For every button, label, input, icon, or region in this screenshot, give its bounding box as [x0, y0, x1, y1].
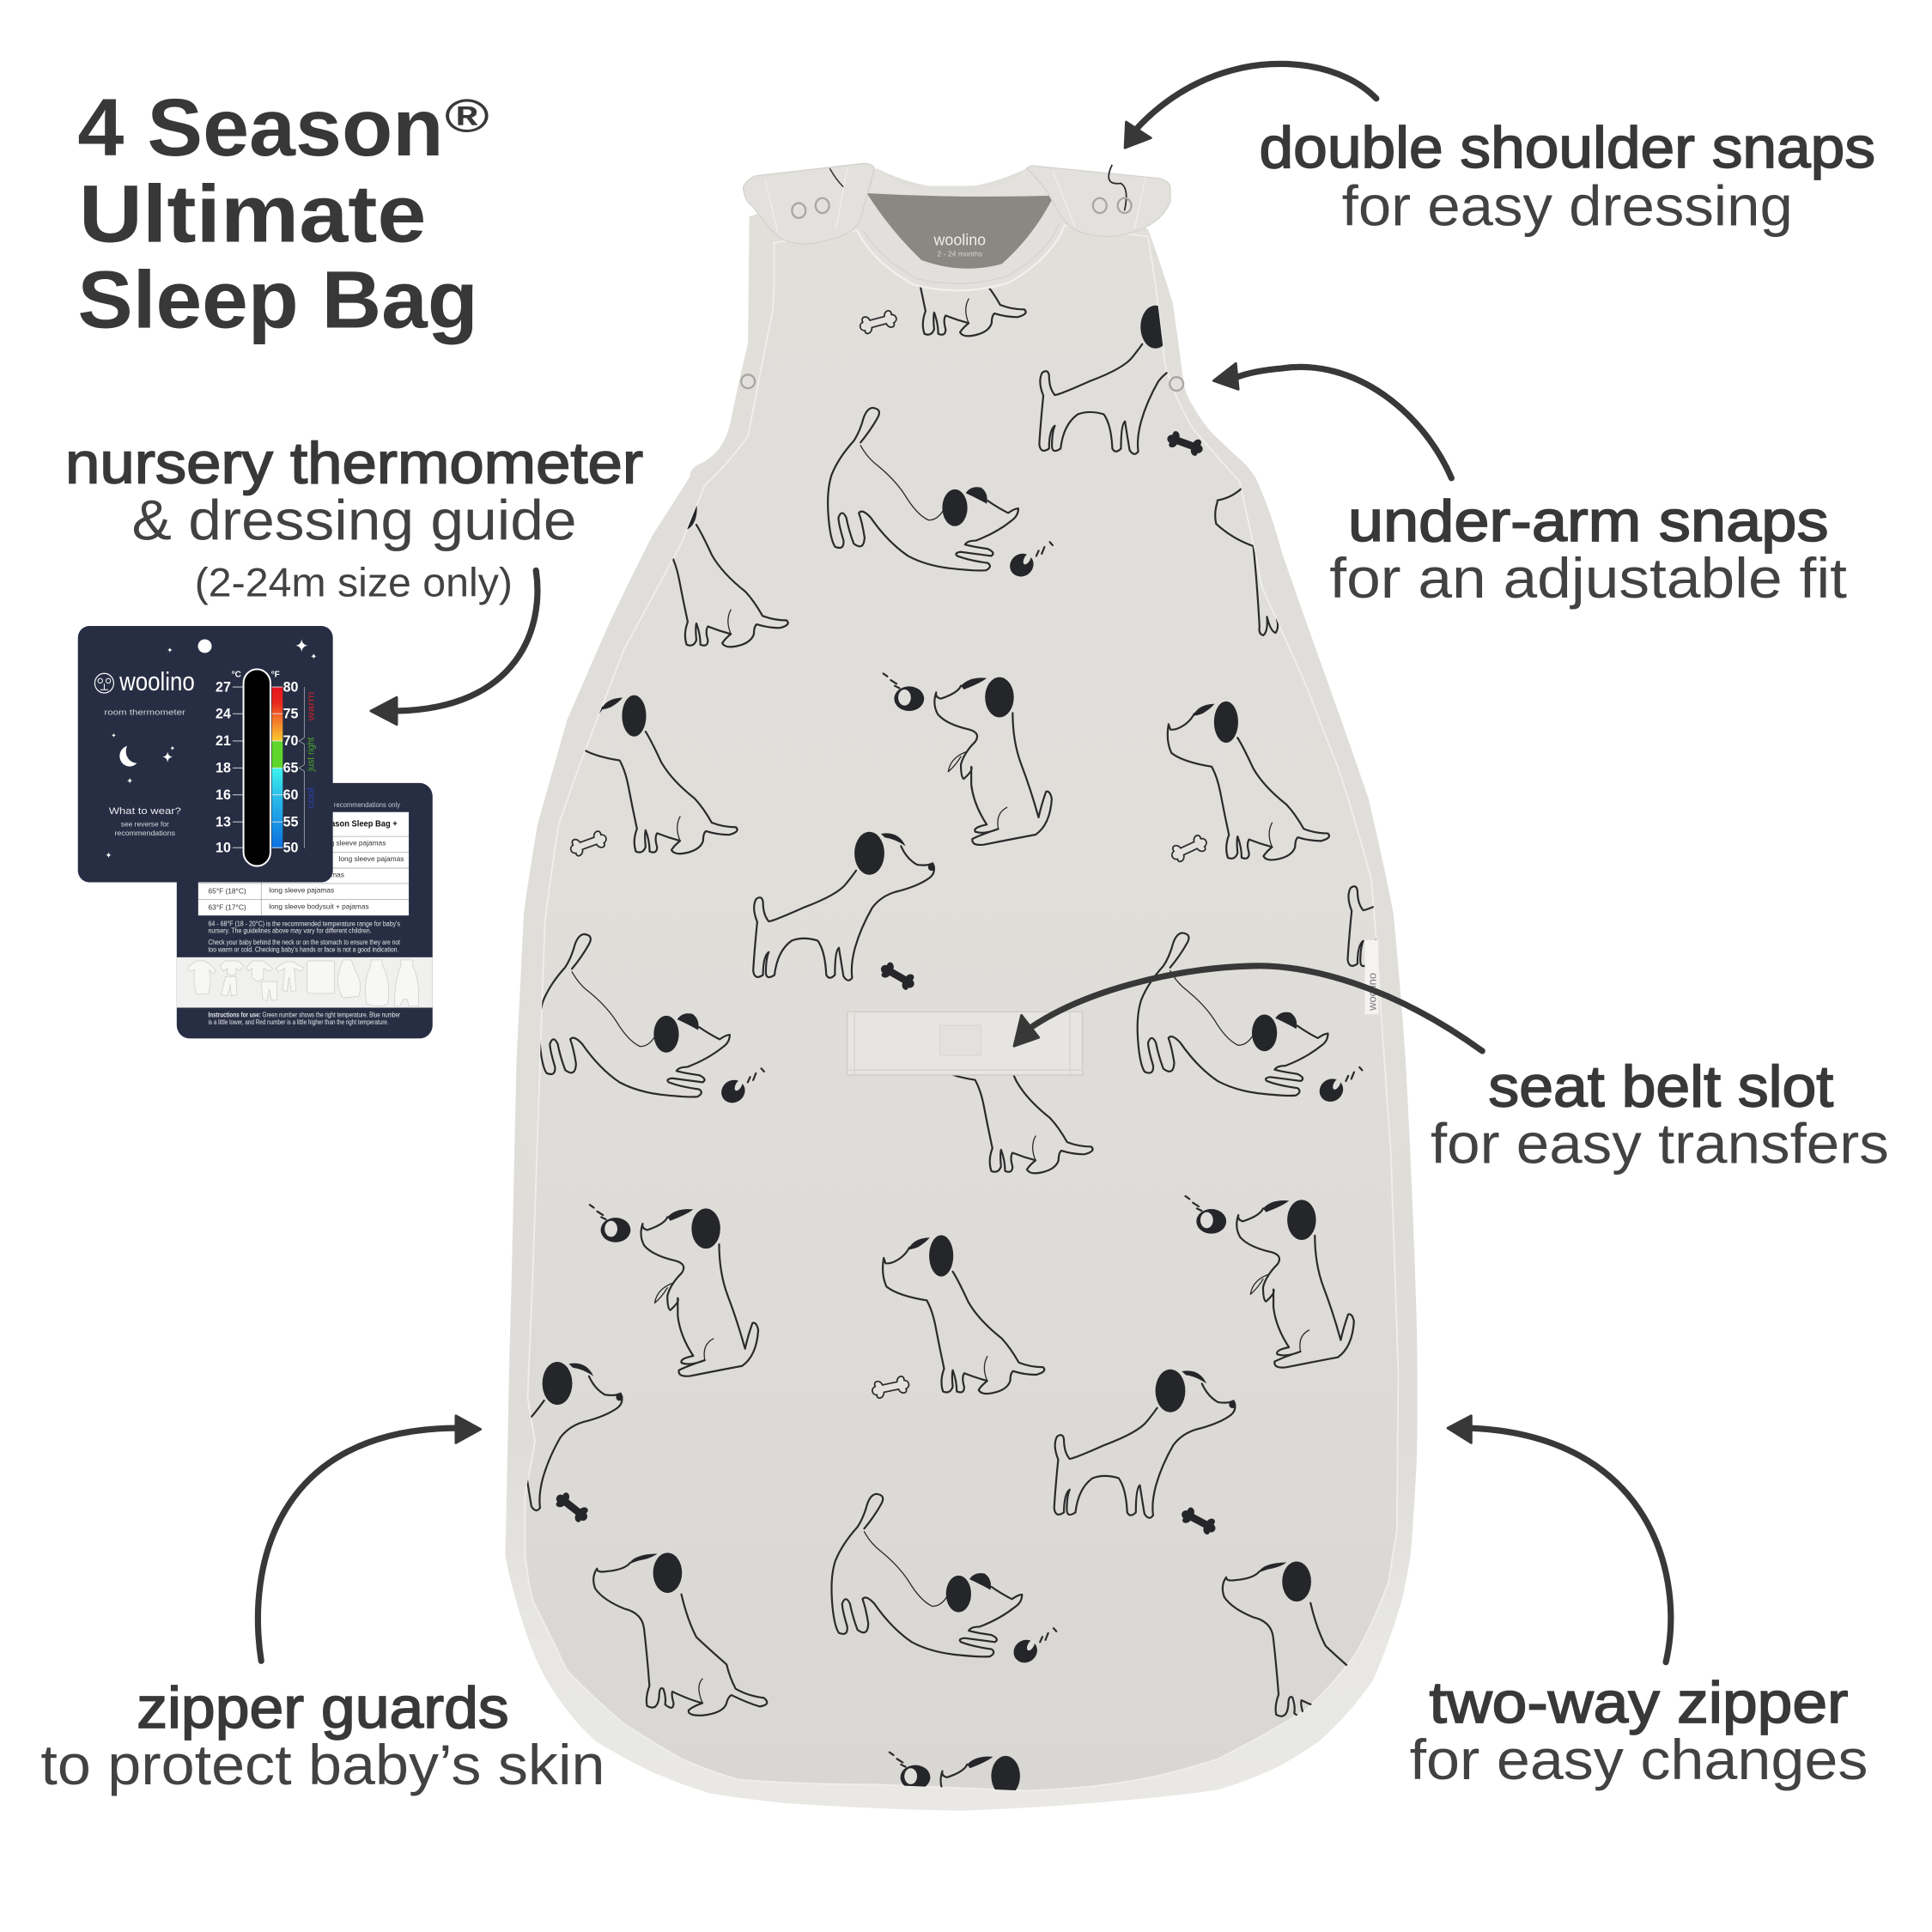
card captions: see reverse for: [121, 821, 169, 829]
card hole: [198, 640, 212, 653]
title: Ultimate: [79, 168, 426, 259]
warm / just right / cool legend: cool: [306, 787, 316, 809]
side label tag: woolino: [1365, 973, 1378, 1012]
callout: seat belt slot: seat belt slot: [1488, 1055, 1833, 1120]
callout: under-arm snaps: [1329, 489, 1847, 610]
fahrenheit scale: 75: [283, 706, 298, 721]
guidance text: Check your baby behind the neck or on the stomach to ensure they are not: [209, 939, 401, 946]
warm / just right / cool legend: warm: [306, 692, 316, 722]
thermometer back card: dressing guide: [177, 783, 433, 1038]
dressing table: long sleeve bodysuit + pajamas: [269, 902, 369, 911]
side label tag: [1364, 940, 1378, 1014]
guidance text: 64 - 68°F (18 - 20°C) is the recommended temperature range for baby's: [209, 920, 400, 927]
fahrenheit scale: 60: [283, 787, 298, 803]
thermometer back card: dressing guide: recommendations only: [334, 801, 400, 809]
title: ®: [445, 90, 489, 143]
colour temperature scale: [233, 687, 283, 848]
callout: zipper guards: to protect baby’s skin: [40, 1733, 605, 1796]
arrow: to shoulder snaps: [1125, 64, 1376, 148]
sleep bag product: [505, 163, 1418, 1810]
partial dog at right armhole: [1215, 487, 1285, 635]
callout: seat belt slot: [1431, 1055, 1889, 1176]
callout: nursery thermometer: (2-24m size only): [195, 561, 513, 606]
fahrenheit scale: °F: [271, 671, 280, 680]
dressing table: long sleeve pajamas: [338, 854, 404, 863]
fahrenheit scale: 50: [283, 840, 298, 855]
garment label text: [933, 231, 986, 258]
warm / just right / cool legend: just right: [306, 737, 316, 772]
warm / just right / cool legend: [299, 687, 316, 848]
fahrenheit scale: 80: [283, 679, 298, 695]
callout: seat belt slot: for easy transfers: [1431, 1112, 1889, 1176]
guidance text: too warm or cold. Checking baby's hands or face is not a good indication.: [209, 945, 398, 953]
callout: under-arm snaps: under-arm snaps: [1348, 489, 1828, 554]
fahrenheit scale: [271, 671, 298, 855]
arrow: to seat belt slot: [1014, 966, 1482, 1051]
shoulder snaps: [792, 198, 829, 218]
clothing illustration band: [177, 957, 433, 1008]
celsius scale: [216, 671, 242, 855]
callout: zipper guards: zipper guards: [137, 1676, 509, 1741]
callout: two-way zipper: for easy changes: [1410, 1728, 1868, 1791]
callout: two-way zipper: [1410, 1671, 1868, 1791]
stars and moon: [106, 639, 317, 858]
card captions: room thermometer: [104, 708, 185, 717]
celsius scale: 24: [216, 706, 231, 721]
guidance text: [209, 920, 401, 953]
callout: nursery thermometer: nursery thermometer: [65, 432, 643, 496]
left shoulder flap: [743, 163, 874, 244]
thermometer front card: [78, 626, 333, 883]
card captions: [104, 708, 185, 837]
callout: under-arm snaps: for an adjustable fit: [1329, 546, 1847, 610]
guidance text: nursery. The guidelines above may vary for different children.: [209, 927, 372, 935]
celsius scale: 21: [216, 733, 231, 749]
celsius scale: 13: [216, 814, 231, 829]
bag body outline: [505, 168, 1418, 1811]
fahrenheit scale: 55: [283, 814, 298, 829]
arrow: to zipper guards: [258, 1416, 481, 1661]
dressing table: [198, 812, 409, 915]
left under-arm snap: [741, 374, 755, 388]
dressing table: long sleeve pajamas: [269, 885, 334, 895]
title: Sleep Bag: [77, 255, 478, 346]
woolino logo: woolino: [118, 668, 195, 696]
garment label text: woolino: [933, 231, 986, 249]
celsius scale: 10: [216, 840, 231, 855]
arrow: to two-way zipper: [1448, 1416, 1671, 1662]
callout: zipper guards: [40, 1676, 605, 1796]
celsius scale: 18: [216, 760, 231, 776]
fahrenheit scale: 70: [283, 733, 298, 749]
celsius scale: 16: [216, 787, 231, 803]
dressing table: long sleeve pajamas: [279, 871, 344, 879]
celsius scale: °C: [232, 671, 242, 680]
instructions text: [209, 1011, 400, 1026]
garment label text: 2 - 24 months: [937, 250, 983, 258]
instructions text: Instructions for use: Green number shows the right temperature. Blue number: [209, 1011, 400, 1019]
callout: nursery thermometer: [65, 432, 643, 606]
dog print pattern: [441, 178, 1529, 1923]
arrow: to under-arm snap: [1213, 363, 1451, 478]
card captions: recommendations: [114, 829, 175, 837]
callout: nursery thermometer: & dressing guide: [132, 489, 577, 552]
neck opening and label: [857, 168, 1065, 290]
dressing table: long sleeve pajamas: [320, 838, 386, 847]
right shoulder flap: [1027, 165, 1170, 236]
arrow: to thermometer cards: [371, 570, 538, 725]
instructions text: is a little lower, and Red number is a little higher than the right temperature.: [209, 1018, 389, 1026]
title: 4 Season: [77, 82, 444, 173]
seat belt slot: [848, 1012, 1083, 1075]
card captions: What to wear?: [109, 806, 181, 817]
shoulder snaps: [1093, 198, 1132, 213]
celsius scale: 27: [216, 679, 231, 695]
dressing table: 65°F (18°C): [209, 887, 246, 896]
bag main fabric with seam: [526, 225, 1398, 1791]
callout: two-way zipper: two-way zipper: [1430, 1671, 1848, 1735]
right under-arm snap: [1170, 377, 1183, 391]
callout: double shoulder snaps: [1260, 116, 1875, 238]
callout: double shoulder snaps: for easy dressing: [1342, 174, 1793, 238]
thermometer tube: [244, 669, 270, 866]
dressing table: 63°F (17°C): [209, 902, 246, 911]
dressing table: 4 Season Sleep Bag +: [314, 820, 398, 829]
callout: double shoulder snaps: double shoulder snaps: [1260, 116, 1875, 180]
fahrenheit scale: 65: [283, 760, 298, 776]
woolino logo: [94, 668, 195, 696]
title: [77, 82, 489, 346]
